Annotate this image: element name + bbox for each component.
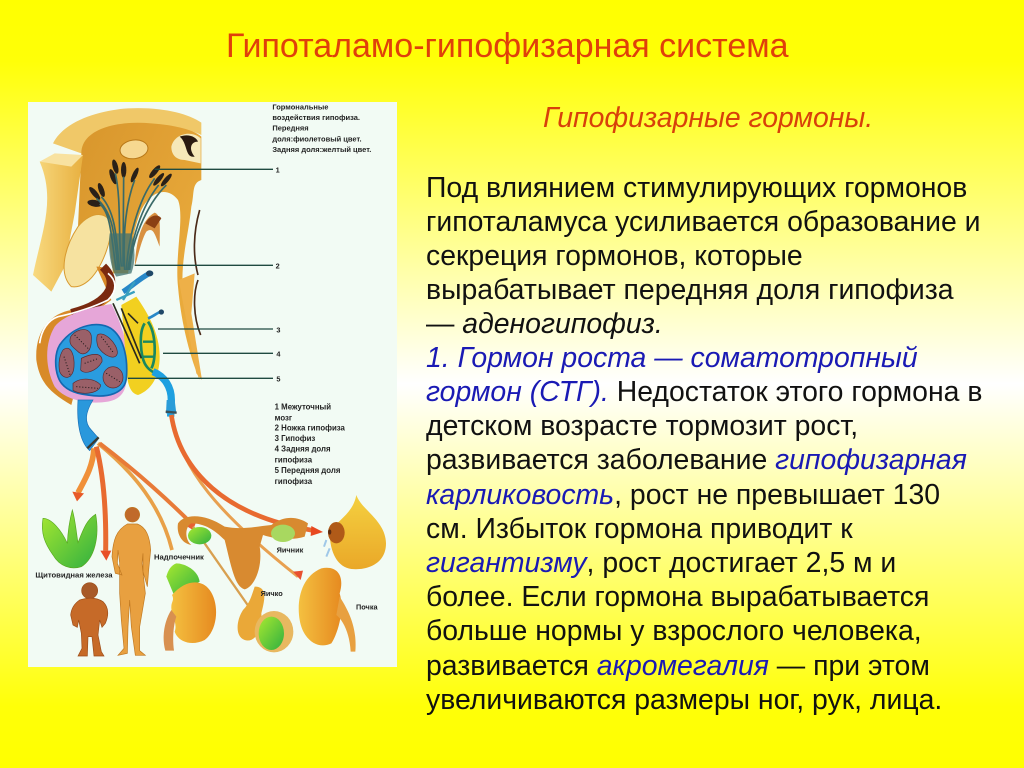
legend: top: воздействия гипофиза.	[272, 113, 360, 122]
text block: увеличиваются размеры ног, рук, лица.	[426, 684, 942, 716]
stalk and neurons	[87, 159, 173, 208]
text block: развивается заболевание гипофизарная	[426, 444, 967, 476]
label: testis: Яичко	[261, 589, 283, 598]
text block: больше нормы у взрослого человека,	[426, 615, 922, 647]
text block: 1. Гормон роста — соматотропный	[426, 342, 918, 374]
legend: top	[272, 102, 371, 154]
text block: более. Если гормона вырабатывается	[426, 581, 929, 613]
icon: kidney	[299, 568, 356, 652]
legend: top: доля:фиолетовый цвет.	[272, 134, 362, 143]
text block: — аденогипофиз.	[426, 308, 663, 340]
icon: adrenal and kidney	[164, 563, 216, 651]
text block: см. Избыток гормона приводит к	[426, 513, 853, 545]
text block: вырабатывает передняя доля гипофиза	[426, 274, 954, 306]
icon: short human figure	[71, 583, 108, 656]
legend: numbered parts	[275, 402, 346, 486]
posterior lobe	[121, 297, 160, 395]
label: thyroid: Щитовидная железа	[35, 570, 113, 579]
legend: top: Гормональные	[272, 102, 328, 111]
label: ovary: Яичник	[277, 546, 304, 555]
subtitle: Гипофизарные гормоны.	[543, 102, 873, 134]
hormone arrows	[72, 415, 323, 621]
icon: breast	[324, 495, 386, 569]
legend: numbered parts: 5 Передняя доля	[275, 466, 341, 475]
pituitary anatomy	[33, 108, 202, 417]
icon: thyroid gland	[42, 510, 97, 568]
legend: top: Передняя	[272, 124, 309, 133]
anatomical diagram	[28, 102, 397, 667]
callout lines and numbers: 2	[276, 261, 280, 270]
text block: развивается акромегалия — при этом	[426, 650, 930, 682]
text block: секреция гормонов, которые	[426, 240, 803, 272]
blue capillaries	[56, 325, 127, 396]
label: kidney: Почка	[356, 602, 378, 611]
callout lines and numbers: 5	[276, 375, 280, 384]
portal vessels	[78, 400, 177, 451]
title: Гипоталамо-гипофизарная система	[226, 27, 789, 65]
legend: numbered parts: 2 Ножка гипофиза	[275, 423, 346, 432]
legend: numbered parts: гипофиза	[275, 477, 313, 486]
callout lines and numbers: 4	[276, 350, 281, 359]
legend: numbered parts: 4 Задняя доля	[275, 445, 331, 454]
callout lines and numbers: 3	[276, 325, 280, 334]
legend: numbered parts: гипофиза	[275, 456, 313, 465]
text block: Под влиянием стимулирующих гормонов	[426, 172, 967, 204]
legend: numbered parts: мозг	[275, 413, 293, 422]
icon: tall human figure	[112, 507, 151, 655]
text block: карликовость, рост не превышает 130	[426, 479, 940, 511]
label: adrenal: Надпочечник	[154, 552, 204, 561]
legend: top: Задняя доля:желтый цвет.	[272, 145, 371, 154]
callout lines and numbers: 1	[276, 166, 280, 175]
text block: гормон (СТГ). Недостаток этого гормона в	[426, 376, 982, 408]
legend: numbered parts: 1 Межуточный	[275, 402, 331, 411]
anterior lobe	[47, 304, 127, 403]
legend: numbered parts: 3 Гипофиз	[275, 434, 315, 443]
text block: гипоталамуса усиливается образование и	[426, 206, 980, 238]
lower half of diagram	[35, 400, 386, 656]
icon: ovaries and uterus	[178, 516, 308, 589]
icon: testis	[238, 587, 293, 652]
callout lines and numbers	[128, 166, 281, 384]
text block: гигантизму, рост достигает 2,5 м и	[426, 547, 896, 579]
text block: детском возрасте тормозит рост,	[426, 410, 858, 442]
